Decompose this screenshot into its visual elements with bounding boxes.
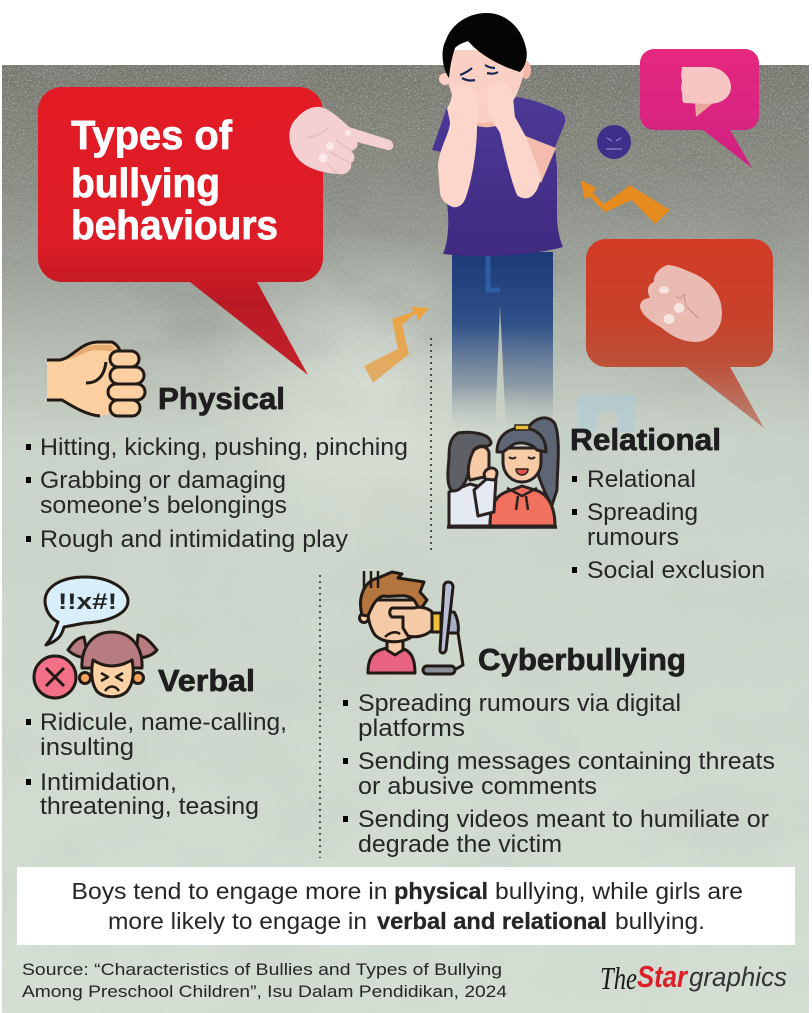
list (26, 434, 408, 553)
heading: Cyberbullying (478, 642, 686, 677)
list: Spreading rumours via digital (358, 690, 681, 717)
list: Sending videos meant to humiliate or (358, 806, 769, 833)
list: threatening, teasing (40, 793, 259, 820)
callout: summary: verbal and relational (377, 908, 607, 934)
list (26, 709, 287, 820)
list (572, 466, 765, 584)
list: or abusive comments (358, 773, 597, 800)
callout: summary (17, 867, 795, 945)
icon: shouting girl: !!x#! (58, 589, 117, 614)
logo: The Star graphics: Star (637, 959, 689, 994)
hair (443, 13, 527, 78)
red speech bubble (586, 239, 773, 428)
face (447, 50, 524, 123)
logo: The Star graphics: graphics (689, 962, 787, 992)
heading: Physical (158, 381, 285, 416)
source note: Source: “Characteristics of Bullies and Types of Bullying (22, 960, 502, 979)
figure: crying boy (432, 13, 565, 430)
arrow: lower orange zigzag (364, 307, 429, 383)
list: Hitting, kicking, pushing, pinching (40, 434, 408, 461)
pink speech bubble (640, 49, 759, 168)
callout: summary: physical (394, 878, 488, 904)
panel: cyberbullying (343, 571, 775, 858)
source note: Among Preschool Children”, Isu Dalam Pendidikan, 2024 (22, 982, 507, 1001)
upper arms (438, 135, 556, 197)
jeans (452, 252, 553, 430)
icon: fist (640, 265, 722, 342)
faded blue shape (578, 395, 635, 432)
logo: The Star graphics: The (600, 960, 637, 996)
list: someone’s belongings (40, 492, 287, 519)
icon: pointing hand (289, 107, 393, 174)
callout: summary: more likely to engage in (108, 908, 367, 934)
title (71, 112, 278, 248)
list: platforms (358, 715, 465, 742)
panel: verbal (26, 577, 287, 820)
closed eyes (460, 65, 498, 81)
list: Relational (587, 466, 696, 493)
arrow: upper orange zigzag (581, 180, 670, 224)
heading: Relational (570, 422, 721, 457)
right arm and hand (487, 81, 541, 198)
title: Types of (71, 112, 232, 158)
list: degrade the victim (358, 831, 562, 858)
source note (22, 960, 507, 1001)
logo: The Star graphics (600, 959, 787, 996)
list: Intimidation, (40, 769, 177, 796)
list: Ridicule, name-calling, (40, 709, 287, 736)
divider: lower dotted line (319, 575, 321, 858)
main title speech bubble (38, 87, 323, 375)
icon: fist (47, 342, 145, 416)
callout: summary: Boys tend to engage more in (72, 878, 388, 904)
list: rumours (587, 524, 679, 551)
callout: summary: bullying, while girls are (495, 878, 743, 904)
list: Rough and intimidating play (40, 526, 348, 553)
title: bullying (71, 160, 220, 206)
ears (439, 61, 531, 85)
icon: thumbs down (681, 67, 731, 117)
list: Spreading (587, 499, 698, 526)
left arm and hand (438, 84, 478, 207)
list: Social exclusion (587, 557, 765, 584)
icon: angry face (597, 125, 631, 159)
icon: boy poked through monitor (360, 571, 463, 674)
panel: physical (26, 342, 408, 553)
divider: upper dotted line (430, 338, 432, 552)
list: insulting (40, 734, 134, 761)
heading: Verbal (158, 663, 255, 698)
icon: shouting girl (34, 577, 157, 698)
panel: relational (447, 418, 765, 584)
list (343, 690, 775, 858)
list: Grabbing or damaging (40, 467, 286, 494)
neck (465, 100, 508, 127)
callout: summary: bullying. (615, 908, 705, 934)
shirt (432, 97, 565, 256)
title: behaviours (71, 202, 278, 248)
icon: whispering girls (447, 418, 558, 527)
list: Sending messages containing threats (358, 748, 775, 775)
